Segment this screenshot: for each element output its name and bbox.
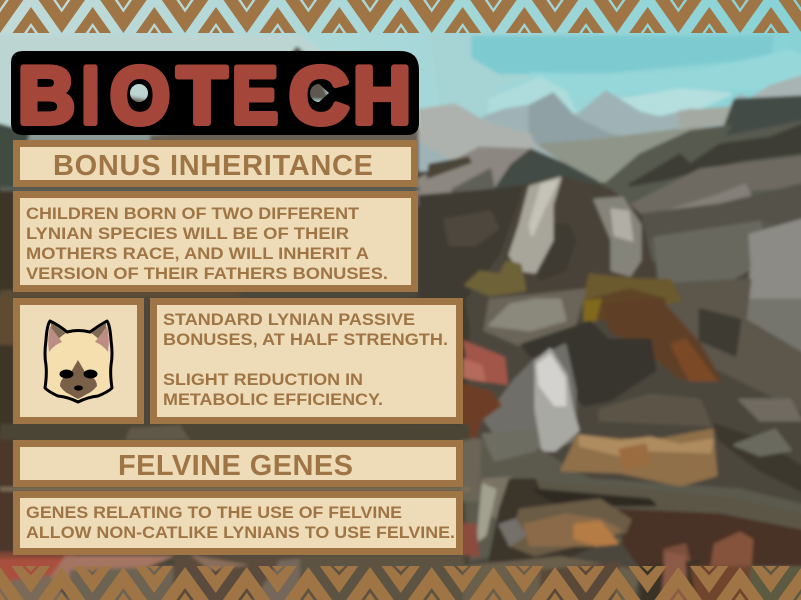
- icon: cat face: [45, 321, 112, 402]
- panel: felvine genes heading: FELVINE GENES: [118, 450, 353, 482]
- panel: felvine genes description: ALLOW NON-CATLIKE LYNIANS TO USE FELVINE.: [26, 523, 455, 542]
- panel: felvine genes heading: [16, 444, 460, 484]
- panel: bonus inheritance description: [16, 194, 414, 288]
- title: BIOTECH: B: [18, 51, 75, 141]
- title: BIOTECH: [11, 51, 419, 141]
- title: BIOTECH: T: [177, 51, 227, 141]
- panel: cat icon: [16, 302, 140, 420]
- panel: bonus inheritance description: CHILDREN BORN OF TWO DIFFERENT: [26, 204, 360, 223]
- top zigzag border: [0, 0, 801, 33]
- panel: passive bonuses: METABOLIC EFFICIENCY.: [163, 390, 383, 409]
- panel: bonus inheritance description: MOTHERS RACE, AND WILL INHERIT A: [26, 244, 369, 263]
- panel: felvine genes description: [16, 494, 460, 552]
- panel: bonus inheritance heading: [16, 144, 414, 184]
- title: BIOTECH: H: [353, 51, 411, 141]
- panel: passive bonuses: SLIGHT REDUCTION IN: [163, 370, 363, 389]
- title: BIOTECH: C: [289, 51, 349, 141]
- panel: passive bonuses: STANDARD LYNIAN PASSIVE: [163, 310, 415, 329]
- panel: bonus inheritance description: VERSION OF THEIR FATHERS BONUSES.: [26, 264, 388, 283]
- panel: passive bonuses: BONUSES, AT HALF STRENGTH.: [163, 330, 448, 349]
- panel: passive bonuses: [154, 302, 460, 420]
- panel: bonus inheritance description: LYNIAN SPECIES WILL BE OF THEIR: [26, 224, 349, 243]
- panel: bonus inheritance heading: BONUS INHERITANCE: [53, 150, 373, 182]
- bottom zigzag border: [0, 566, 801, 600]
- panel: felvine genes description: GENES RELATING TO THE USE OF FELVINE: [26, 503, 402, 522]
- title: BIOTECH: O: [110, 51, 170, 141]
- title: BIOTECH: I: [82, 51, 100, 141]
- title: BIOTECH: E: [232, 51, 278, 141]
